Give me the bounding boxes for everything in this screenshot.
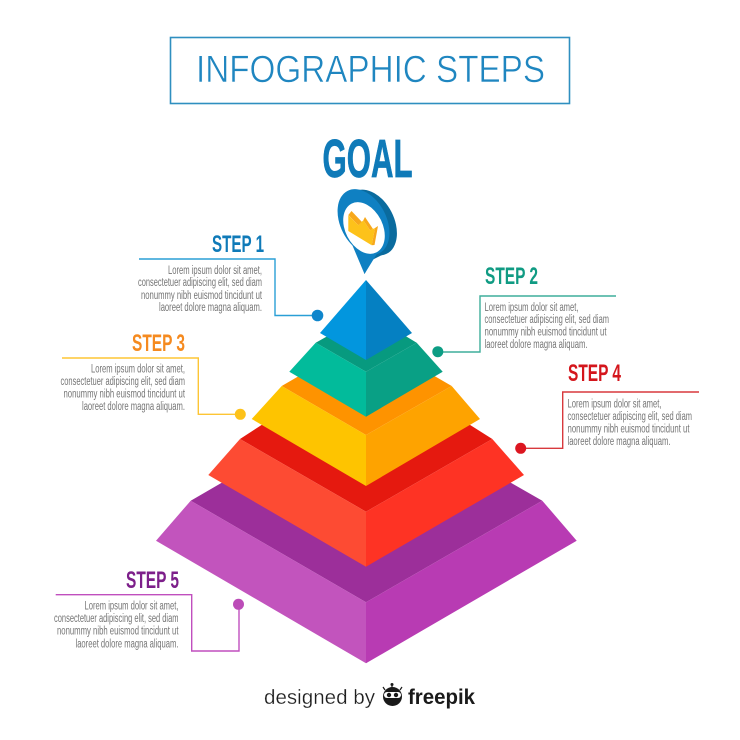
step 4 callout: Lorem ipsum dolor sit amet, <box>568 398 662 410</box>
step 1 callout <box>138 231 323 321</box>
pyramid <box>156 280 577 663</box>
step 2 callout: consectetuer adipiscing elit, sed diam <box>484 314 609 326</box>
step 4 callout: STEP 4 <box>568 360 621 387</box>
step 2 callout <box>432 263 616 357</box>
step 3 callout: consectetuer adipiscing elit, sed diam <box>60 376 185 388</box>
step 1 callout: STEP 1 <box>212 231 264 258</box>
level 4: red <box>208 423 524 567</box>
freepik credit: freepik <box>408 686 475 709</box>
step 2 callout: laoreet dolore magna aliquam. <box>484 339 588 351</box>
title box: INFOGRAPHIC STEPS <box>196 49 545 91</box>
step 2 callout: Lorem ipsum dolor sit amet, <box>484 302 578 314</box>
icon: goal pin with crown <box>327 180 407 274</box>
level 5: purple <box>156 480 577 663</box>
step 4 callout: laoreet dolore magna aliquam. <box>568 436 670 448</box>
step 5 callout: consectetuer adipiscing elit, sed diam <box>54 613 178 625</box>
step 5 callout <box>54 567 244 651</box>
step 2 callout: STEP 2 <box>485 263 538 290</box>
freepik credit: designed by <box>264 686 376 709</box>
step 1 callout: nonummy nibh euismod tincidunt ut <box>141 290 263 302</box>
step 5 callout: STEP 5 <box>126 567 179 594</box>
step 3 callout: nonummy nibh euismod tincidunt ut <box>64 388 186 400</box>
step 1 callout: consectetuer adipiscing elit, sed diam <box>138 277 262 289</box>
freepik credit <box>264 683 475 709</box>
level 2: green <box>289 334 443 417</box>
icon: freepik logo <box>383 683 402 706</box>
step 5 callout: laoreet dolore magna aliquam. <box>76 638 178 650</box>
step 2 callout: nonummy nibh euismod tincidunt ut <box>484 326 607 338</box>
step 5 callout: nonummy nibh euismod tincidunt ut <box>57 626 179 638</box>
goal heading: GOAL <box>322 129 412 189</box>
step 1 callout: laoreet dolore magna aliquam. <box>159 302 262 314</box>
level 3: yellow <box>252 374 480 486</box>
step 1 callout: Lorem ipsum dolor sit amet, <box>168 265 262 277</box>
step 4 callout <box>515 360 699 454</box>
step 5 callout: Lorem ipsum dolor sit amet, <box>84 600 178 612</box>
title box <box>170 38 570 104</box>
step 3 callout <box>60 330 246 420</box>
step 3 callout: STEP 3 <box>132 330 185 357</box>
step 3 callout: laoreet dolore magna aliquam. <box>82 401 185 413</box>
step 3 callout: Lorem ipsum dolor sit amet, <box>91 364 185 376</box>
level 1: blue <box>320 280 412 360</box>
